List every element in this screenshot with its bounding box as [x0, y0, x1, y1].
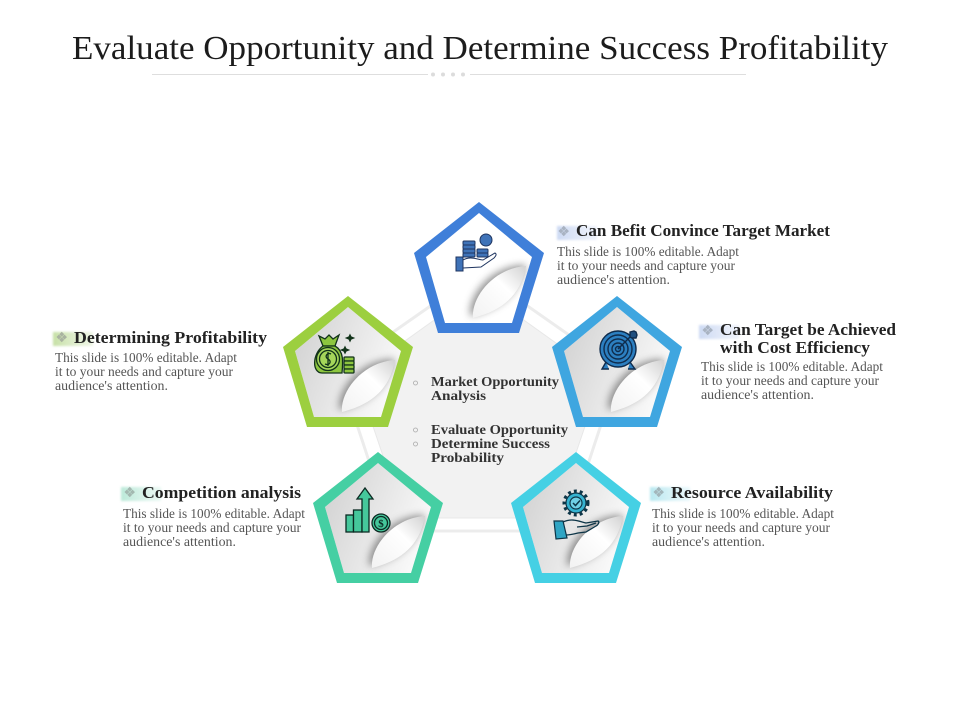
center list: Determine Success — [431, 437, 551, 452]
center list: Analysis — [431, 389, 487, 404]
label: top market block: audience's attention. — [557, 272, 670, 287]
label: profitability block — [53, 328, 268, 393]
title divider — [152, 72, 746, 76]
icon: hand holding coins — [456, 234, 496, 271]
label: cost efficiency block — [699, 320, 896, 402]
icon: rising bars and coin: $ — [378, 518, 384, 530]
icon: money bag — [315, 335, 354, 373]
label: profitability block: it to your needs and capture your — [55, 364, 233, 379]
label: cost efficiency block: This slide is 100% editable. Adapt — [701, 359, 883, 374]
pentagon: bottom-left teal green — [313, 452, 443, 583]
center list — [414, 375, 568, 466]
label: resource block: audience's attention. — [652, 534, 765, 549]
label: top market block: it to your needs and capture your — [557, 258, 735, 273]
label: profitability block: This slide is 100% editable. Adapt — [55, 350, 237, 365]
pentagon: right sky blue — [552, 296, 682, 427]
pentagon: bottom-right cyan — [511, 452, 641, 583]
label: competition block: it to your needs and capture your — [123, 520, 301, 535]
label: resource block: This slide is 100% editable. Adapt — [652, 506, 834, 521]
label: competition block: audience's attention. — [123, 534, 236, 549]
label: top market block — [557, 221, 831, 287]
label: resource block: Resource Availability — [671, 483, 834, 502]
label: cost efficiency block: Can Target be Achieved — [720, 320, 896, 339]
label: profitability block: Determining Profitability — [74, 328, 268, 347]
label: competition block: This slide is 100% editable. Adapt — [123, 506, 305, 521]
label: competition block: Competition analysis — [142, 483, 302, 502]
label: top market block: Can Befit Convince Target Market — [576, 221, 831, 240]
panel: central pentagon — [339, 272, 619, 531]
label: resource block: it to your needs and capture your — [652, 520, 830, 535]
label: top market block: This slide is 100% editable. Adapt — [557, 244, 739, 259]
pentagon: top blue — [414, 202, 544, 333]
label: profitability block: audience's attention. — [55, 378, 168, 393]
icon: target with arrow — [600, 331, 637, 369]
label: resource block — [650, 483, 834, 549]
center list: Market Opportunity — [431, 375, 559, 390]
label: cost efficiency block: audience's attention. — [701, 387, 814, 402]
icon: gear and open hand — [554, 491, 599, 539]
center list: Evaluate Opportunity — [431, 423, 568, 438]
icon: rising bars and coin — [346, 488, 390, 532]
pentagon: left green — [283, 296, 413, 427]
label: cost efficiency block: it to your needs and capture your — [701, 373, 879, 388]
title: Evaluate Opportunity and Determine Success Profitability — [72, 30, 888, 67]
label: competition block — [121, 483, 305, 549]
label: cost efficiency block: with Cost Efficiency — [720, 338, 871, 357]
center list: Probability — [431, 451, 504, 466]
